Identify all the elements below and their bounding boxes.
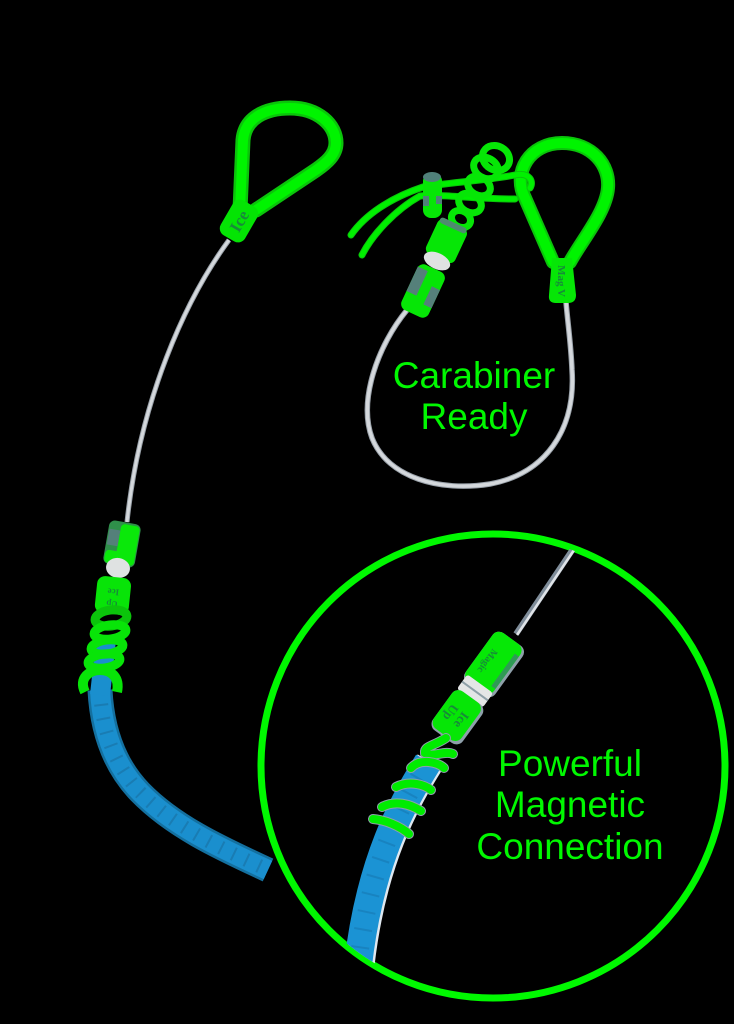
label: Carabiner Ready: Carabiner (393, 355, 555, 396)
left leash: full cord assembly (83, 108, 336, 870)
inset blue sleeve (358, 762, 430, 965)
upper magnet (424, 216, 469, 265)
lower magnet housing with Up Ice logo (94, 575, 132, 616)
inset upper magnet (461, 629, 527, 700)
label: Powerful Magnetic Connection: Powerful (498, 743, 642, 784)
blue sleeve inside coil (100, 640, 106, 695)
silver wire (127, 240, 229, 522)
right loop handle (521, 143, 608, 262)
right loop connector with Mag V logo: Mag V (555, 265, 567, 297)
lower magnet housing with Up Ice logo: Ice (107, 586, 120, 598)
lower magnet (399, 262, 447, 320)
inset lower magnet with Up Ice logo: Ice (450, 709, 472, 732)
inset circle: magnetic connection closeup (261, 534, 725, 998)
green spring coils (83, 608, 128, 692)
toggle stopper (423, 172, 442, 218)
inset lower magnet with Up Ice logo: Up (440, 701, 462, 724)
left loop connector with Ice logo: Ice (226, 207, 253, 235)
label: Powerful Magnetic Connection: Magnetic (495, 784, 645, 825)
right loop connector with Mag V logo (549, 258, 576, 303)
label: Carabiner Ready: Ready (421, 396, 528, 437)
inset upper magnet: Magic (474, 647, 499, 675)
left loop handle (240, 108, 336, 210)
label: Powerful Magnetic Connection: Connection (476, 826, 664, 867)
inset spring coils (373, 738, 453, 834)
white magnet joint (104, 556, 132, 580)
inset white joint (457, 674, 493, 708)
inset wire (516, 549, 574, 635)
lower magnet housing with Up Ice logo: Up (106, 598, 118, 610)
upper magnet housing (102, 520, 142, 568)
white joint (421, 248, 453, 274)
cord tails and knot (351, 174, 531, 255)
carabiner leash: looped cord assembly (351, 141, 608, 486)
label: Powerful Magnetic Connection (476, 743, 664, 867)
silver wire loop (367, 302, 572, 486)
blue sleeve with ribbing (100, 690, 268, 870)
inset lower magnet with Up Ice logo (428, 687, 486, 748)
knot spring coils (448, 141, 514, 231)
left loop connector with Ice logo (217, 197, 261, 245)
label: Carabiner Ready (393, 355, 555, 437)
